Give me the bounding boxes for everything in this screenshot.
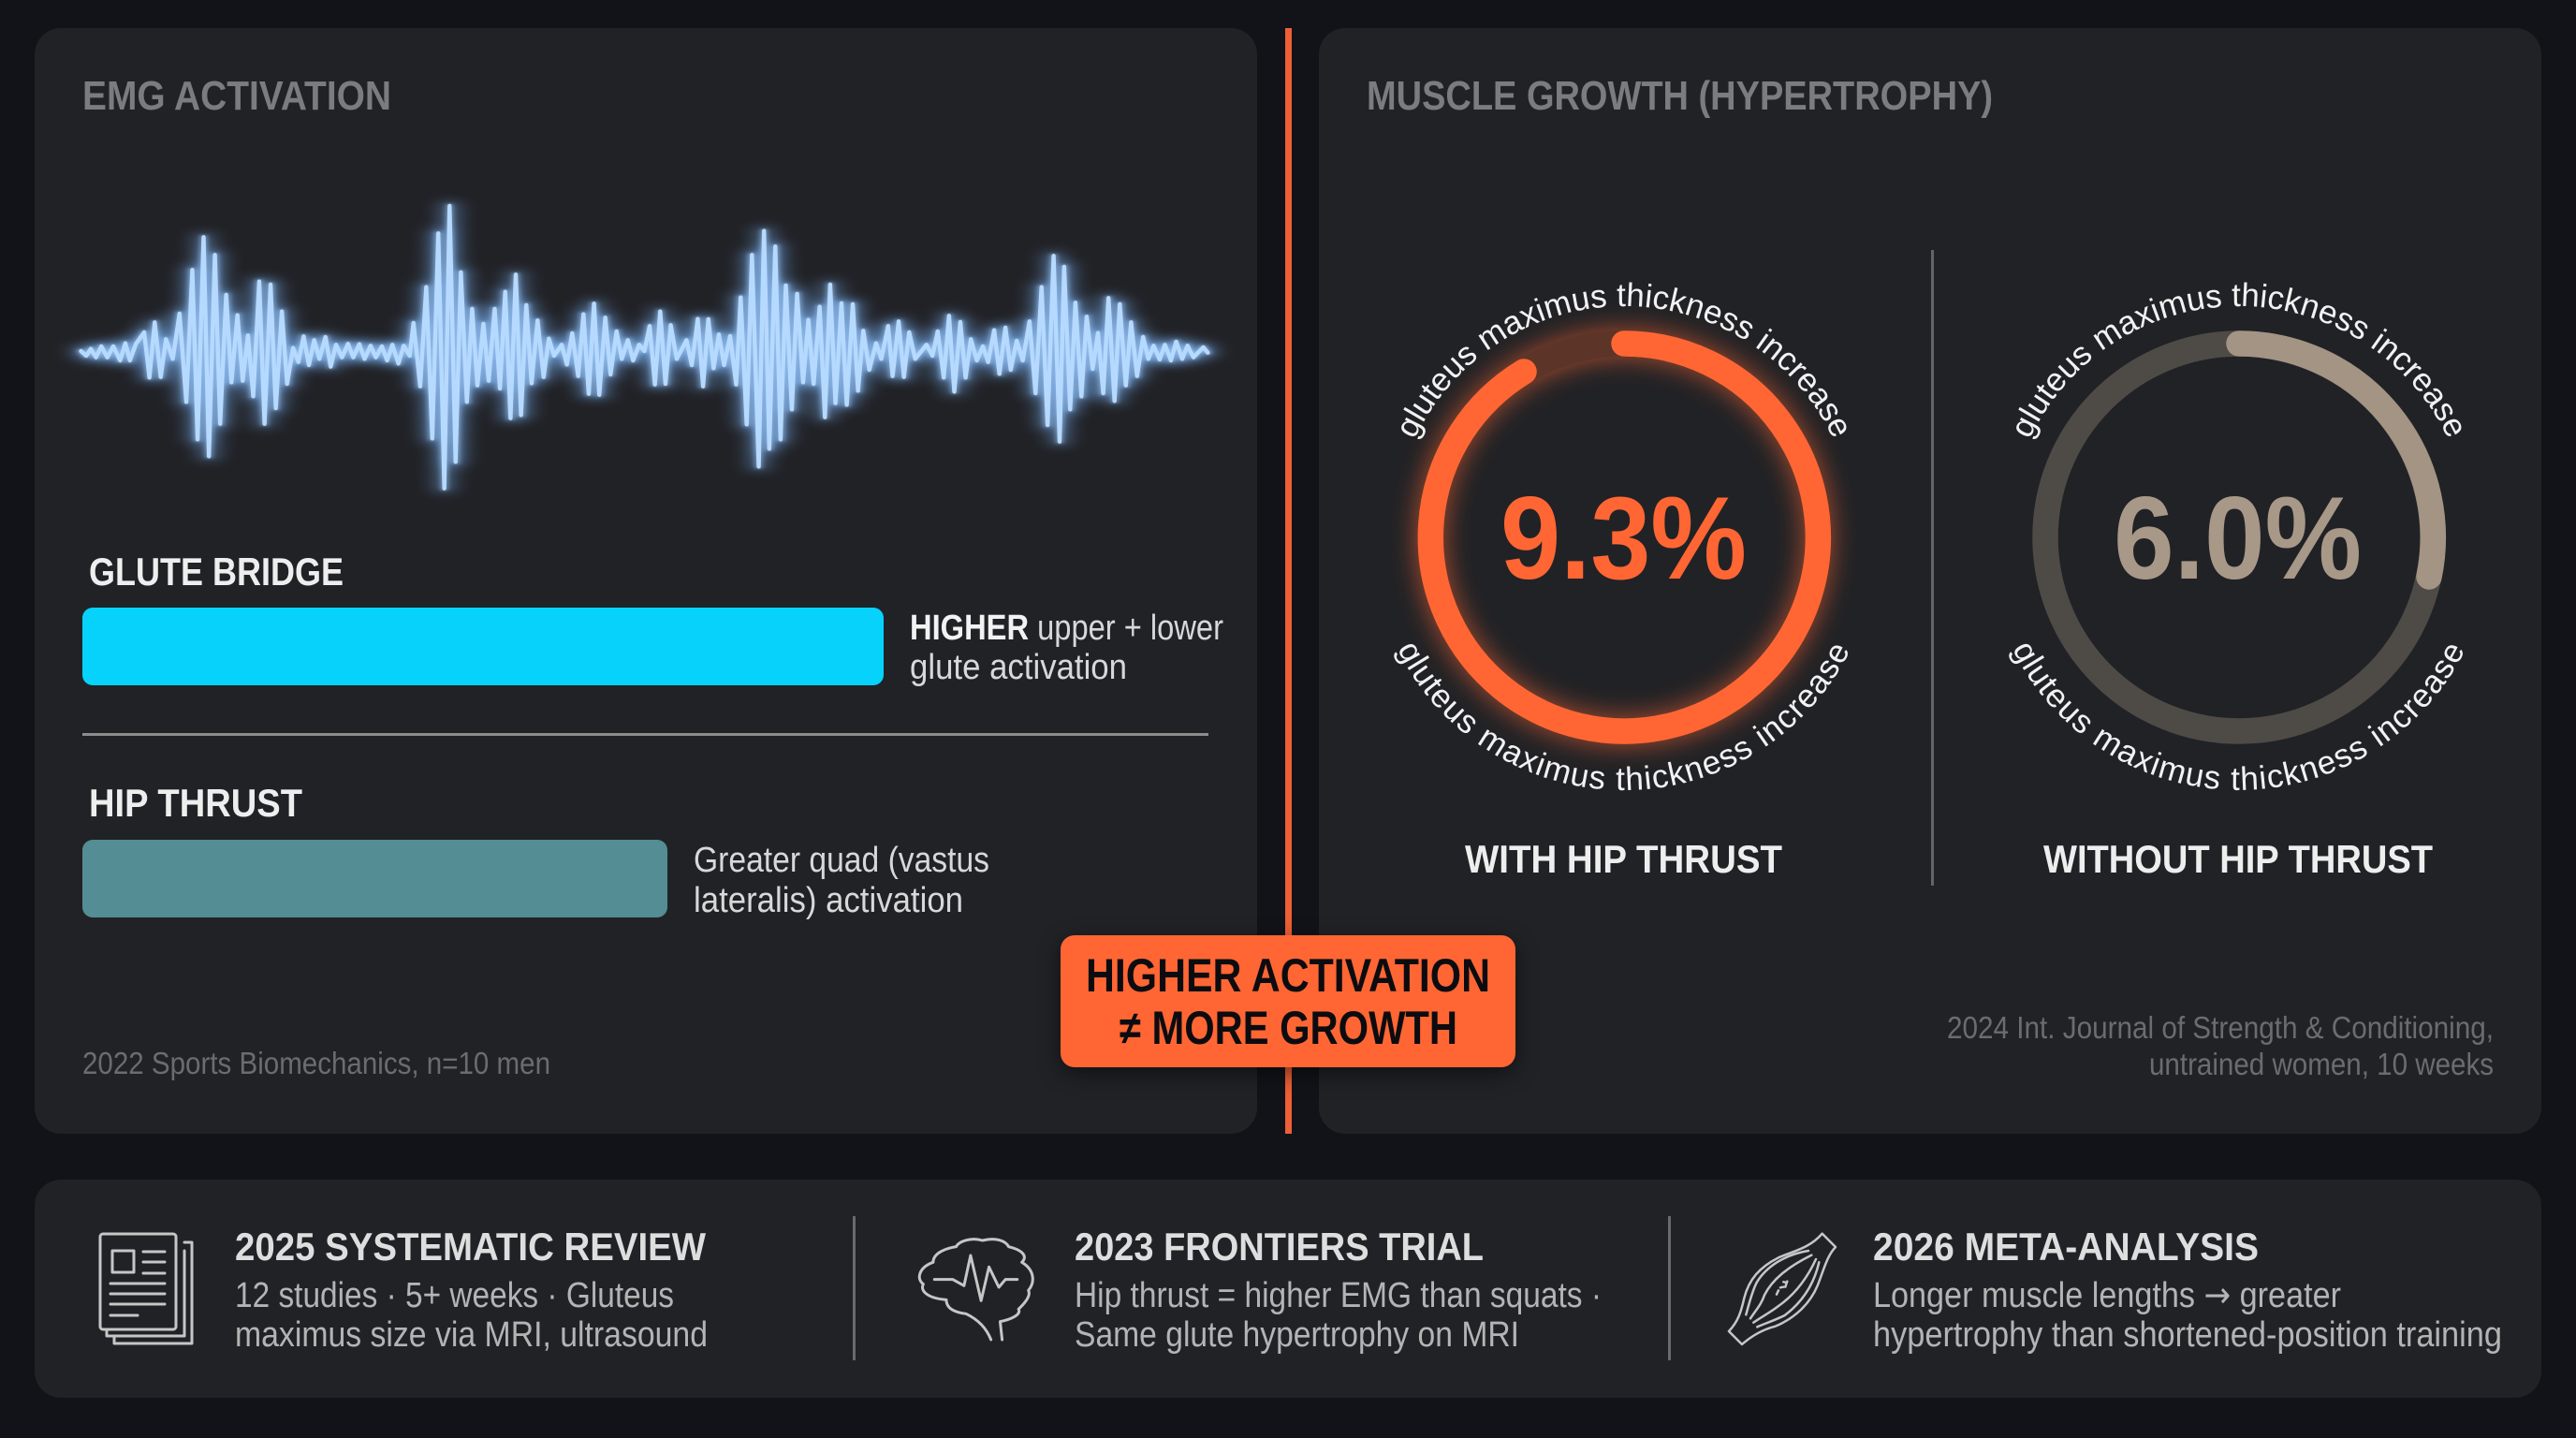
center divider line xyxy=(1285,28,1292,1134)
text: 2026 meta-analysis: Longer muscle lengths → greater xyxy=(1873,1274,2341,1315)
citation: EMG study: 2022 Sports Biomechanics, n=10 men xyxy=(82,1046,550,1080)
curved label bottom: gluteus maximus thickness increase xyxy=(1394,644,1848,790)
icon: muscle xyxy=(1729,1234,1836,1344)
label: without hip thrust: WITHOUT HIP THRUST xyxy=(2043,837,2433,881)
text: 2025 systematic review: maximus size via MRI, ultrasound xyxy=(235,1315,708,1355)
citation: growth study: untrained women, 10 weeks xyxy=(2149,1047,2494,1081)
label: hip thrust: HIP THRUST xyxy=(89,781,302,825)
callout: higher activation is not more growth: HIGHER ACTIVATION xyxy=(1086,949,1490,1002)
value: 9.3%: 9.3% xyxy=(1500,474,1747,604)
curved label bottom: gluteus maximus thickness increase xyxy=(2009,644,2463,790)
text: 2023 frontiers trial xyxy=(1075,1225,1602,1355)
ring chart: without hip thrust 6.0% xyxy=(2009,283,2463,790)
text: hip thrust result xyxy=(694,841,989,920)
citation: growth study: 2024 Int. Journal of Strength & Conditioning, xyxy=(1947,1010,2494,1045)
bar: glute bridge xyxy=(82,608,884,685)
bar: hip thrust xyxy=(82,840,667,917)
value: 6.0%: 6.0% xyxy=(2114,474,2362,604)
callout: higher activation is not more growth xyxy=(1061,935,1515,1074)
panel: evidence strip xyxy=(35,1180,2541,1398)
text: hip thrust result: Greater quad (vastus xyxy=(694,841,989,880)
ring chart: with hip thrust 9.3% xyxy=(1394,283,1850,790)
text: 2025 systematic review: 2025 SYSTEMATIC REVIEW xyxy=(235,1225,706,1269)
heading: muscle growth: MUSCLE GROWTH (HYPERTROPHY) xyxy=(1367,73,1993,119)
text: 2025 systematic review xyxy=(235,1225,708,1355)
text: 2023 frontiers trial: 2023 FRONTIERS TRIAL xyxy=(1075,1225,1484,1269)
curved label top: gluteus maximus thickness increase xyxy=(2016,283,2462,439)
curved label top: gluteus maximus thickness increase xyxy=(1401,283,1846,439)
icon: stacked document xyxy=(100,1234,192,1343)
text: 2025 systematic review: 12 studies · 5+ weeks · Gluteus xyxy=(235,1276,674,1315)
panel: muscle growth xyxy=(1319,28,2541,1134)
label: with hip thrust: WITH HIP THRUST xyxy=(1465,837,1782,881)
label: glute bridge: GLUTE BRIDGE xyxy=(89,550,344,594)
text: 2023 frontiers trial: Hip thrust = higher EMG than squats · xyxy=(1075,1276,1602,1315)
text: 2026 meta-analysis: hypertrophy than shortened-position training xyxy=(1873,1315,2502,1355)
text: glute bridge result xyxy=(910,609,1223,687)
text: glute bridge result: HIGHER upper + lower xyxy=(910,609,1223,648)
text: 2023 frontiers trial: Same glute hypertrophy on MRI xyxy=(1075,1315,1519,1355)
text: glute bridge result: glute activation xyxy=(910,648,1127,687)
callout: higher activation is not more growth: ≠ MORE GROWTH xyxy=(1120,1002,1457,1054)
panel: EMG activation xyxy=(35,28,1257,1134)
text: 2026 meta-analysis: 2026 META-ANALYSIS xyxy=(1873,1225,2259,1269)
icon: brain with pulse xyxy=(919,1240,1032,1340)
text: hip thrust result: lateralis) activation xyxy=(694,881,963,920)
chart: EMG waveform xyxy=(81,206,1208,489)
citation: growth study xyxy=(1947,1010,2494,1081)
text: 2026 meta-analysis xyxy=(1873,1225,2502,1355)
heading: EMG activation: EMG ACTIVATION xyxy=(82,73,391,119)
